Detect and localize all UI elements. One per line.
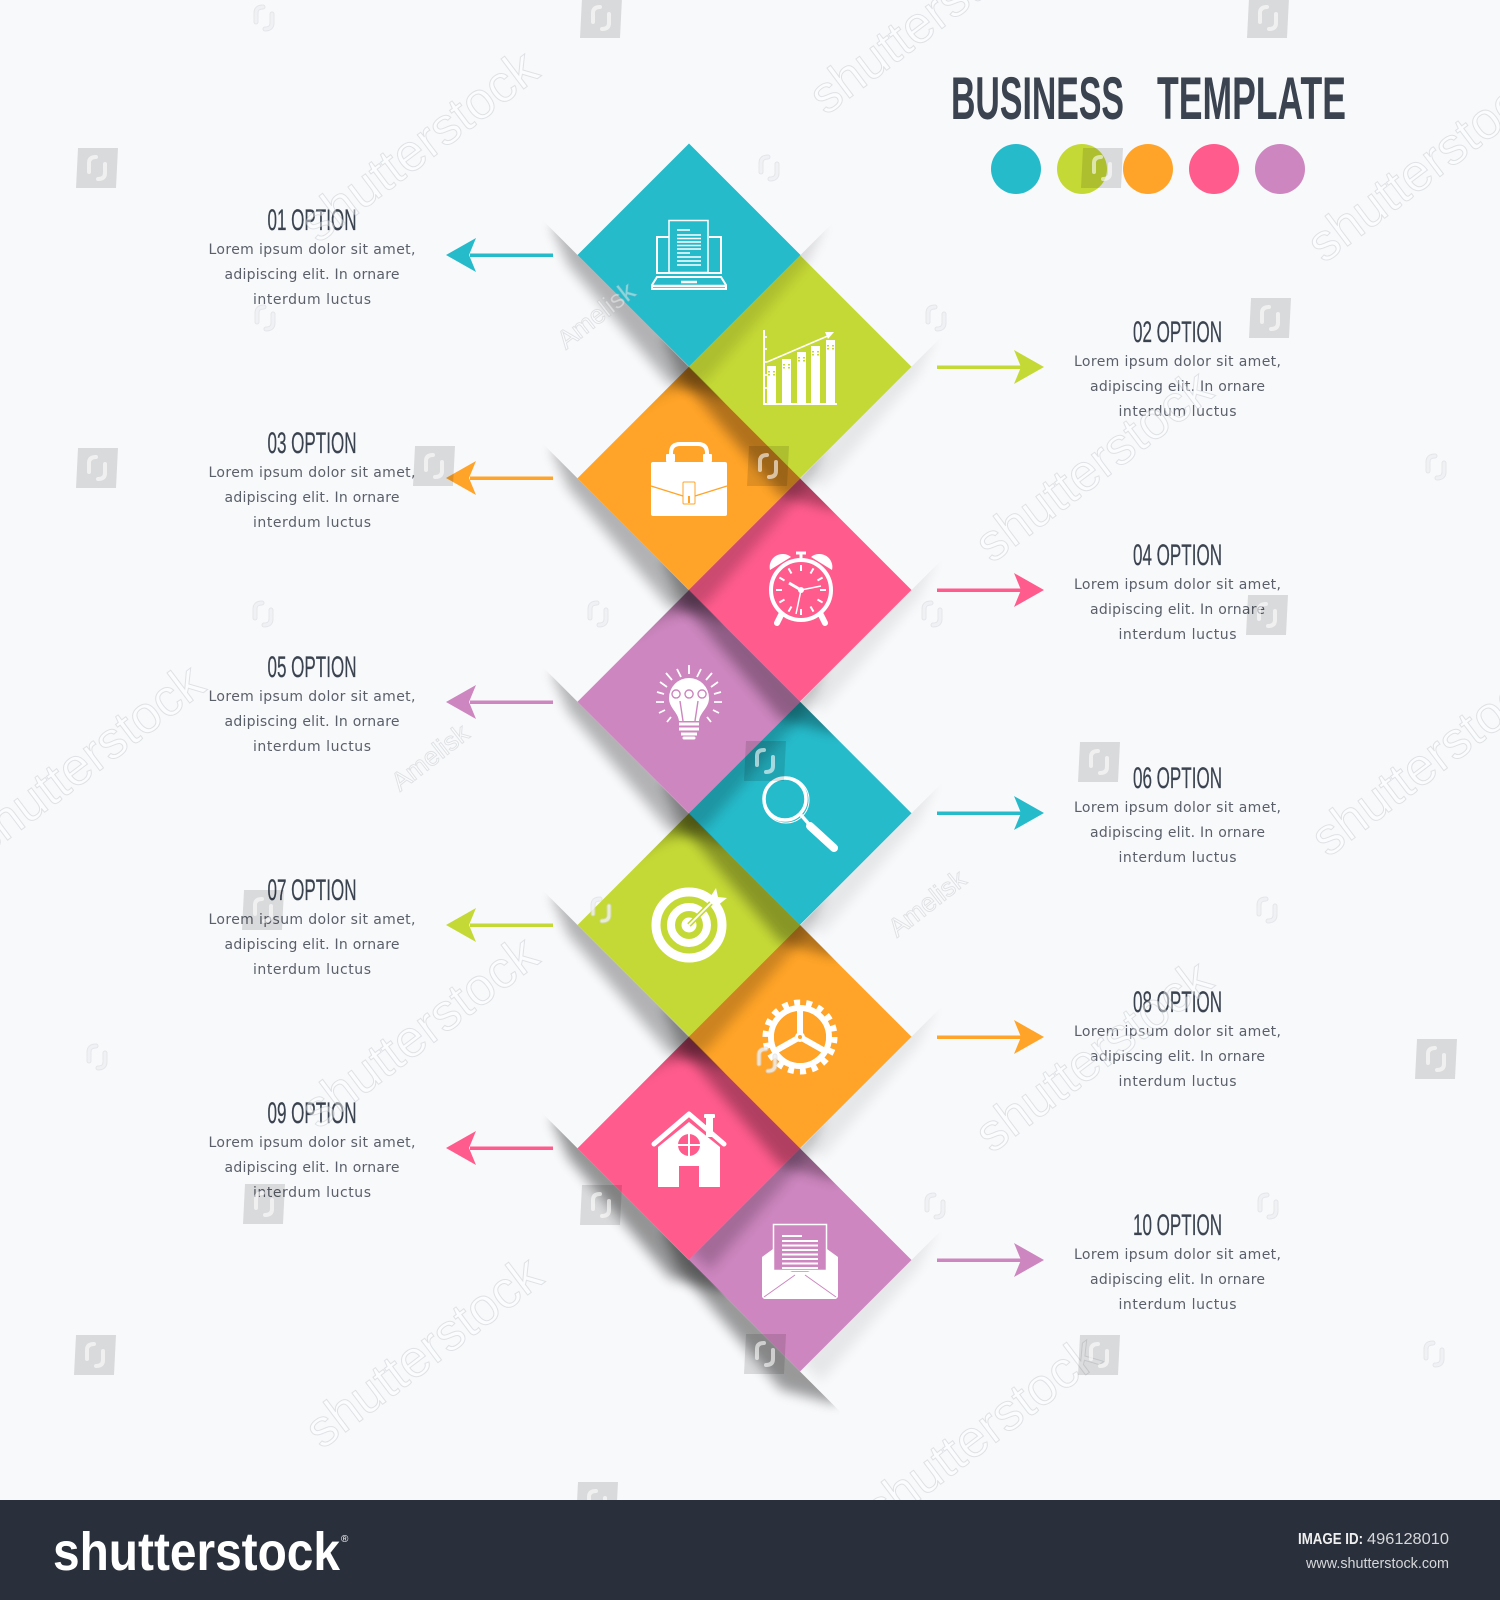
option 01: heading and text: Lorem ipsum dolor sit amet, [208, 242, 416, 258]
arrow 08 [937, 1020, 1044, 1054]
option 04: heading and text: adipiscing elit. In ornare [1090, 602, 1265, 618]
watermark overlay: shutterstock [852, 1324, 1112, 1540]
image id label: IMAGE ID: [1298, 1531, 1363, 1548]
option 01: heading and text [208, 204, 416, 308]
option 05: heading and text: adipiscing elit. In ornare [224, 714, 400, 730]
diamond 10: envelope [643, 1148, 953, 1423]
arrow 05 [446, 685, 553, 719]
option 04: heading and text [1074, 539, 1281, 643]
option 06: heading and text: 06 OPTION [1133, 762, 1222, 795]
diamond 4: alarm clock [643, 478, 953, 753]
watermark overlay: Amelisk [385, 717, 475, 797]
watermark overlay: Amelisk [551, 275, 641, 355]
option 08: heading and text: Lorem ipsum dolor sit amet, [1074, 1024, 1281, 1040]
option 03: heading and text: Lorem ipsum dolor sit amet, [208, 465, 416, 481]
option 05: heading and text: 05 OPTION [268, 651, 356, 684]
option 05: heading and text [208, 651, 416, 755]
option 02: heading and text [1074, 316, 1281, 420]
diamond 7: target [532, 814, 842, 1110]
option 03: heading and text: 03 OPTION [268, 427, 356, 460]
option 03: heading and text [208, 427, 416, 531]
option 02: heading and text: adipiscing elit. In ornare [1090, 379, 1265, 395]
icon: laptop [652, 220, 726, 289]
option 09: heading and text: interdum luctus [253, 1185, 371, 1201]
option 01: heading and text: interdum luctus [253, 292, 371, 308]
icon: target [656, 888, 727, 958]
watermark overlay: shutterstock [964, 948, 1224, 1164]
option 01: heading and text: adipiscing elit. In ornare [224, 267, 400, 283]
arrow 01 [446, 238, 553, 272]
option 02: heading and text: interdum luctus [1118, 404, 1236, 420]
option 04: heading and text: interdum luctus [1118, 627, 1236, 643]
option 02: heading and text: 02 OPTION [1133, 316, 1222, 349]
option 06: heading and text [1074, 762, 1281, 866]
icon: house [654, 1114, 724, 1187]
arrow 06 [937, 796, 1044, 830]
option 07: heading and text [208, 874, 416, 978]
option 01: heading and text: 01 OPTION [268, 204, 356, 237]
icon: alarm clock [770, 553, 832, 623]
option 08: heading and text [1074, 986, 1281, 1090]
option 03: heading and text: interdum luctus [253, 515, 371, 531]
icon: briefcase [651, 444, 727, 516]
footer bar [0, 1500, 1500, 1600]
watermark overlay: shutterstock [964, 358, 1224, 574]
diamond 6: magnifier [643, 702, 953, 977]
option 04: heading and text: 04 OPTION [1133, 539, 1222, 572]
option 09: heading and text: Lorem ipsum dolor sit amet, [208, 1135, 416, 1151]
icon: light bulb [656, 665, 722, 738]
watermark overlay: shutterstock [290, 924, 550, 1140]
footer logo: shutterstock [53, 1522, 341, 1582]
option 03: heading and text: adipiscing elit. In ornare [224, 490, 400, 506]
arrow 04 [937, 573, 1044, 607]
arrow 02 [937, 350, 1044, 384]
icon: magnifier [763, 777, 834, 848]
icon: envelope [762, 1224, 838, 1299]
option 04: heading and text: Lorem ipsum dolor sit amet, [1074, 577, 1281, 593]
option 10: heading and text [1074, 1209, 1281, 1313]
watermark overlay: shutterstock [294, 1244, 554, 1460]
option 08: heading and text: 08 OPTION [1133, 986, 1222, 1019]
option 07: heading and text: 07 OPTION [268, 874, 356, 907]
option 09: heading and text: adipiscing elit. In ornare [224, 1160, 400, 1176]
icon: gear [766, 1003, 834, 1071]
option 09: heading and text: 09 OPTION [268, 1097, 356, 1130]
watermark overlay: shutterstock [290, 38, 550, 254]
option 08: heading and text: adipiscing elit. In ornare [1090, 1049, 1265, 1065]
option 02: heading and text: Lorem ipsum dolor sit amet, [1074, 354, 1281, 370]
option 08: heading and text: interdum luctus [1118, 1074, 1236, 1090]
diamond 9: house [532, 1037, 842, 1312]
arrow 07 [446, 908, 553, 942]
diamond 3: briefcase [532, 367, 842, 664]
icon: bar chart [764, 330, 837, 404]
watermark overlay: Amelisk [882, 863, 972, 943]
option 07: heading and text: adipiscing elit. In ornare [224, 937, 400, 953]
arrow 10 [937, 1243, 1044, 1277]
option 10: heading and text: 10 OPTION [1133, 1209, 1222, 1242]
diamond 2: bar chart [643, 255, 953, 530]
arrow 09 [446, 1131, 553, 1165]
registered mark: ® [341, 1534, 349, 1545]
diamond 8: gear [643, 925, 953, 1200]
option 07: heading and text: interdum luctus [253, 962, 371, 978]
diamond 1: laptop with document [532, 144, 842, 440]
arrow 03 [446, 461, 553, 495]
title: TEMPLATE [1157, 65, 1346, 132]
colour legend dots [991, 144, 1305, 194]
option 09: heading and text [208, 1097, 416, 1201]
image id number: 496128010 [1367, 1531, 1449, 1548]
diamond 5: light bulb [532, 590, 842, 887]
option 05: heading and text: Lorem ipsum dolor sit amet, [208, 689, 416, 705]
title: BUSINESS [951, 65, 1124, 132]
website: www.shutterstock.com [1305, 1555, 1449, 1572]
option 05: heading and text: interdum luctus [253, 739, 371, 755]
option 06: heading and text: adipiscing elit. In ornare [1090, 825, 1265, 841]
option 07: heading and text: Lorem ipsum dolor sit amet, [208, 912, 416, 928]
option 06: heading and text: Lorem ipsum dolor sit amet, [1074, 800, 1281, 816]
option 06: heading and text: interdum luctus [1118, 850, 1236, 866]
option 10: heading and text: Lorem ipsum dolor sit amet, [1074, 1247, 1281, 1263]
option 10: heading and text: adipiscing elit. In ornare [1090, 1272, 1265, 1288]
option 10: heading and text: interdum luctus [1118, 1297, 1236, 1313]
